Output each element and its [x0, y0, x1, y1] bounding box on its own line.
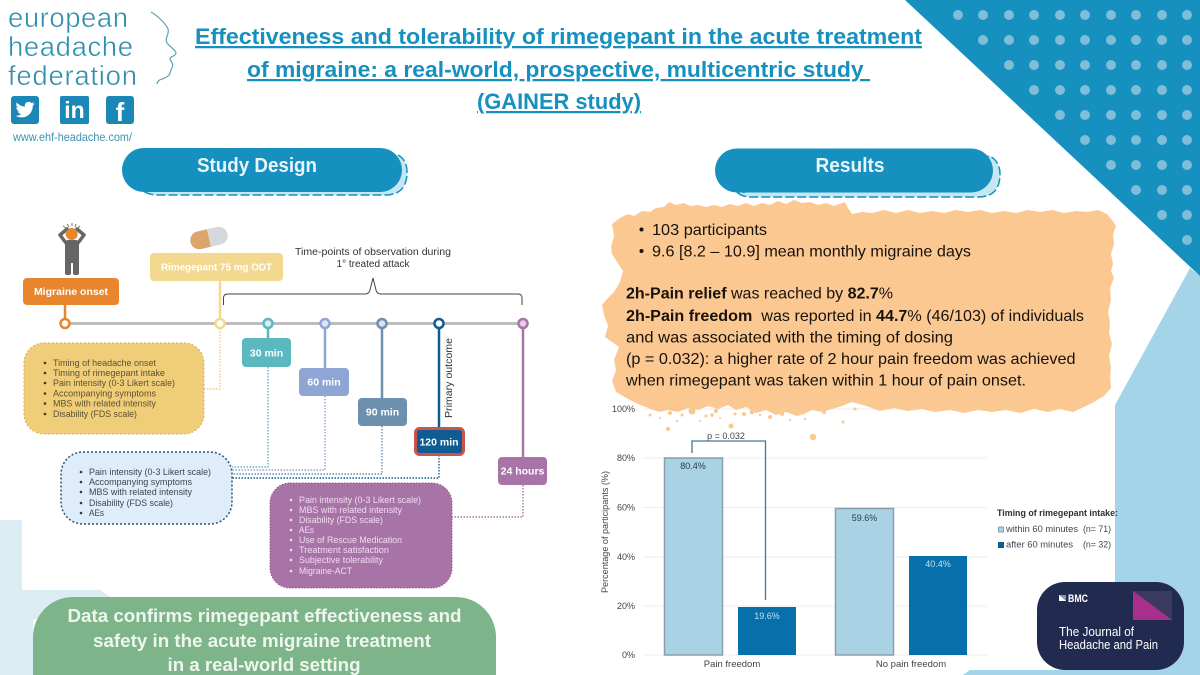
bracket: observation time-points: [224, 247, 522, 305]
legend: timing of intake: after 60 minutes: [1006, 540, 1074, 550]
logo: european headache federation: [8, 2, 137, 91]
label: 120 min primary outcome: 120 min: [419, 436, 459, 448]
significance bracket: p = 0.032: [707, 431, 745, 441]
x axis labels: [704, 659, 946, 670]
y axis labels: 20%: [617, 601, 635, 611]
label: migraine onset: [23, 278, 119, 305]
bracket: observation time-points: Time-points of observation during: [295, 247, 451, 258]
text: outcome findings: 2h-Pain relief was reached by 82.7%: [626, 286, 893, 302]
x axis labels: No pain freedom: [876, 659, 946, 670]
logo: BMC journal: Headache and Pain: [1059, 637, 1158, 652]
bar value labels: 80.4%: [680, 461, 706, 471]
panel: baseline assessments: Pain intensity (0-3 Likert scale): [53, 378, 175, 389]
title: Effectiveness and tolerability of rimegepant in the acute treatment: [195, 24, 923, 49]
label: 60 min: [299, 368, 349, 396]
significance bracket: [692, 431, 766, 600]
panel: assessments at 30-120 min: [61, 452, 232, 524]
bullet list: participants: 103 participants: [652, 222, 767, 239]
logo: european headache federation: federation: [8, 60, 137, 91]
panel: assessments at 30-120 min: Disability (FDS scale): [89, 498, 173, 509]
decoration: dotted blue triangle top right: [905, 0, 1200, 276]
logo: european headache federation: headache: [8, 31, 133, 62]
y axis title: Percentage of participants (%): [600, 471, 610, 593]
legend: timing of intake: (n= 71): [1083, 524, 1111, 534]
label: rimegepant dose: Rimegepant 75 mg ODT: [161, 262, 273, 274]
icon: linkedin: in: [64, 97, 85, 123]
label: 90 min: 90 min: [366, 406, 399, 418]
heading: results: [715, 148, 1000, 197]
icon: facebook: [106, 96, 134, 127]
panel: assessments at 30-120 min: Accompanying symptoms: [89, 477, 192, 488]
bullet list: participants: [640, 222, 971, 260]
bar chart: pain freedom by timing of intake: [600, 404, 987, 670]
title: (GAINER study): [477, 89, 641, 114]
decoration: peach splatter: [648, 408, 856, 440]
label: 60 min: 60 min: [307, 376, 341, 388]
title: of migraine: a real-world, prospective, multicentric study: [247, 57, 870, 82]
dotted connectors: [204, 329, 523, 517]
heading: study design: [122, 148, 407, 195]
label: 30 min: 30 min: [250, 348, 283, 360]
x axis labels: Pain freedom: [704, 659, 760, 670]
label: 90 min: [358, 398, 407, 426]
heading: results: Results: [816, 155, 884, 177]
bars: [664, 458, 967, 655]
bar value labels: [680, 461, 951, 621]
bullet list: participants: 9.6 [8.2 – 10.9] mean monthly migraine days: [652, 244, 971, 260]
y axis labels: 60%: [617, 502, 635, 512]
y axis labels: 0%: [622, 650, 635, 660]
panel: conclusion: Data confirms rimegepant effectiveness and: [68, 606, 462, 626]
logo: BMC journal: [1037, 582, 1184, 670]
label: 120 min primary outcome: [416, 338, 464, 454]
text: outcome findings: 2h-Pain freedom was reported in 44.7% (46/103) of individuals: [626, 308, 1084, 325]
y axis labels: 80%: [617, 453, 635, 463]
panel: assessments at 24 hours: MBS with related intensity: [299, 505, 402, 516]
panel: baseline assessments: Accompanying symptoms: [53, 388, 156, 400]
panel: assessments at 30-120 min: Pain intensity (0-3 Likert scale): [89, 467, 211, 478]
bar value labels: 59.6%: [852, 513, 877, 523]
panel: conclusion: in a real-world setting: [168, 655, 360, 675]
panel: assessments at 24 hours: Use of Rescue Medication: [299, 535, 402, 546]
bracket: observation time-points: 1° treated attack: [337, 259, 410, 270]
panel: assessments at 24 hours: [270, 483, 452, 588]
label: 30 min: [242, 338, 291, 367]
panel: baseline assessments: MBS with related intensity: [53, 398, 156, 410]
icon: face profile: [151, 12, 176, 84]
logo: BMC journal: The Journal of: [1059, 624, 1134, 639]
icon: capsule: [188, 225, 230, 251]
label: 24 hours: [498, 457, 547, 485]
icon: facebook: f: [116, 97, 125, 127]
panel: assessments at 24 hours: Migraine-ACT: [299, 566, 352, 577]
website url: www.ehf-headache.com/: [12, 130, 133, 144]
legend: timing of intake: [997, 508, 1118, 550]
panel: assessments at 24 hours: AEs: [299, 525, 314, 536]
heading: study design: Study Design: [197, 155, 317, 177]
legend: timing of intake: (n= 32): [1083, 540, 1111, 550]
background: light blue corner shapes: [0, 268, 1200, 675]
y axis labels: [612, 404, 635, 660]
text: outcome findings: when rimegepant was taken within 1 hour of pain onset.: [625, 372, 1026, 390]
label: 120 min primary outcome: Primary outcome: [443, 338, 455, 418]
logo: BMC journal: BMC: [1068, 593, 1088, 605]
logo: european headache federation: european: [8, 2, 128, 33]
panel: conclusion: safety in the acute migraine treatment: [93, 631, 431, 651]
panel: assessments at 24 hours: Pain intensity (0-3 Likert scale): [299, 495, 421, 506]
legend: timing of intake: within 60 minutes: [1005, 524, 1079, 534]
bar value labels: 40.4%: [925, 559, 951, 569]
panel: assessments at 24 hours: Disability (FDS scale): [299, 515, 383, 526]
panel: assessments at 24 hours: Subjective tolerability: [299, 555, 383, 566]
y axis labels: 100%: [612, 404, 635, 414]
text: outcome findings: (p = 0.032): a higher rate of 2 hour pain freedom was achieved: [626, 351, 1076, 368]
y axis labels: 40%: [617, 552, 635, 562]
panel: conclusion: [33, 597, 496, 675]
icon: twitter: [11, 96, 39, 124]
bar value labels: 19.6%: [754, 611, 780, 621]
text: outcome findings: and was associated with the timing of dosing: [626, 330, 953, 346]
icon: linkedin: [60, 96, 89, 124]
label: migraine onset: Migraine onset: [34, 286, 109, 298]
icon: person with headache: [60, 223, 84, 275]
panel: results summary: [602, 200, 1116, 440]
panel: baseline assessments: Timing of rimegepant intake: [53, 368, 165, 379]
panel: baseline assessments: [24, 343, 204, 434]
label: rimegepant dose: [150, 253, 283, 281]
panel: assessments at 30-120 min: AEs: [89, 508, 104, 519]
label: 24 hours: 24 hours: [501, 466, 545, 478]
title: [195, 24, 923, 114]
panel: assessments at 30-120 min: MBS with related intensity: [89, 487, 192, 498]
text: outcome findings: [625, 286, 1084, 390]
panel: baseline assessments: Disability (FDS scale): [53, 409, 137, 420]
legend: timing of intake: Timing of rimegepant intake:: [997, 508, 1118, 518]
timeline: [60, 281, 528, 517]
panel: assessments at 24 hours: Treatment satisfaction: [299, 545, 389, 556]
panel: baseline assessments: Timing of headache onset: [53, 358, 156, 369]
